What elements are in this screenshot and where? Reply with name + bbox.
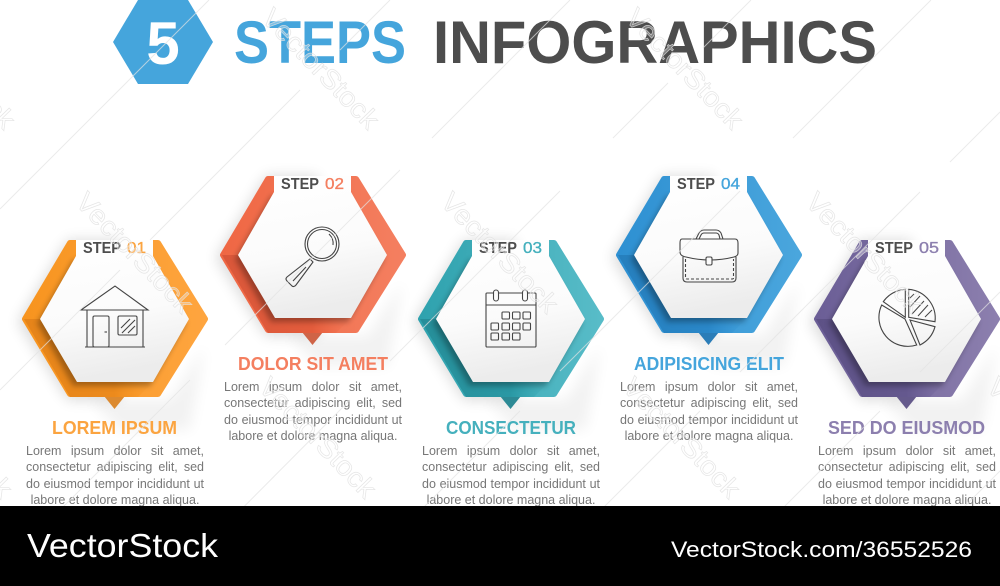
panel: step 03 hexagon [414, 240, 601, 438]
step label: STEP [677, 176, 715, 193]
icon: pie chart [879, 289, 935, 346]
text block: step 04 description: do eiusmod tempor incididunt ut [620, 413, 798, 427]
text block: step 02 description: consectetur adipiscing elit, sed [224, 396, 402, 410]
panel: step 03 hexagon: 03 [523, 240, 542, 257]
watermarks: VectorStock [617, 372, 746, 504]
text block: step 02 description: do eiusmod tempor incididunt ut [224, 413, 402, 427]
text block: step 01 description: labore et dolore magna aliqua. [31, 493, 199, 507]
panel: step 01 hexagon: 01 [127, 240, 146, 257]
text block: step 04 description [620, 380, 798, 443]
watermarks: VectorStock [800, 187, 929, 319]
text block: step 04 description: consectetur adipiscing elit, sed [620, 396, 798, 410]
heading: sed do eiusmod: SED DO EIUSMOD [828, 417, 985, 438]
watermarks: VectorStock [435, 187, 564, 319]
title [113, 0, 877, 84]
step label: STEP [83, 240, 121, 257]
panel: step 02 hexagon [216, 176, 403, 374]
icon: calendar [486, 290, 536, 347]
icon: magnifying glass [286, 227, 339, 287]
text block: step 05 description: labore et dolore magna aliqua. [823, 493, 991, 507]
heading: consectetur: CONSECTETUR [446, 417, 576, 438]
watermarks: VectorStock [253, 372, 382, 504]
heading: adipisicing elit: ADIPISICING ELIT [634, 353, 785, 374]
text block: step 05 description: consectetur adipiscing elit, sed [818, 460, 996, 474]
panel: step 05 hexagon: 05 [919, 240, 939, 257]
heading: lorem ipsum: LOREM IPSUM [52, 417, 177, 438]
panel: step 01 hexagon [18, 240, 205, 438]
text block: step 03 description [422, 444, 600, 507]
text block: step 04 description: Lorem ipsum dolor sit amet, [620, 380, 798, 394]
badge: hexagon with number 5 [113, 0, 213, 84]
icon: briefcase [680, 230, 738, 282]
panel: step 04 hexagon: 04 [721, 176, 740, 193]
text block: step 03 description: labore et dolore magna aliqua. [427, 493, 595, 507]
text block: step 02 description [224, 380, 402, 443]
panel: step 04 hexagon [612, 176, 799, 374]
icon: house [81, 286, 148, 347]
watermarks: VectorStock [620, 3, 749, 135]
badge: hexagon with number 5: 5 [146, 10, 180, 77]
text block: step 02 description: Lorem ipsum dolor sit amet, [224, 380, 402, 394]
step label: STEP [479, 240, 517, 257]
panel: step 05 hexagon [810, 240, 997, 438]
text block: step 03 description: do eiusmod tempor incididunt ut [422, 477, 600, 491]
text block: step 01 description: consectetur adipiscing elit, sed [26, 460, 204, 474]
text block: step 05 description [818, 444, 996, 507]
watermarks: VectorStock [256, 3, 385, 135]
footer image id: VectorStock.com/36552526 [671, 537, 972, 562]
step label: STEP [281, 176, 319, 193]
text block: step 04 description: labore et dolore magna aliqua. [625, 429, 793, 443]
panel: step 02 hexagon: 02 [325, 176, 344, 193]
title word: INFOGRAPHICS: INFOGRAPHICS [433, 9, 877, 76]
heading: dolor sit amet: DOLOR SIT AMET [238, 353, 389, 374]
text block: step 03 description: Lorem ipsum dolor sit amet, [422, 444, 600, 458]
text block: step 03 description: consectetur adipiscing elit, sed [422, 460, 600, 474]
text block: step 01 description: do eiusmod tempor incididunt ut [26, 477, 204, 491]
text block: step 01 description [26, 444, 204, 507]
footer logo text: VectorStock [27, 527, 219, 564]
step label: STEP [875, 240, 913, 257]
text block: step 05 description: Lorem ipsum dolor sit amet, [818, 444, 996, 458]
text block: step 01 description: Lorem ipsum dolor sit amet, [26, 444, 204, 458]
text block: step 02 description: labore et dolore magna aliqua. [229, 429, 397, 443]
text block: step 05 description: do eiusmod tempor incididunt ut [818, 477, 996, 491]
watermarks: VectorStock [70, 187, 199, 319]
title word: STEPS: STEPS [234, 9, 406, 76]
